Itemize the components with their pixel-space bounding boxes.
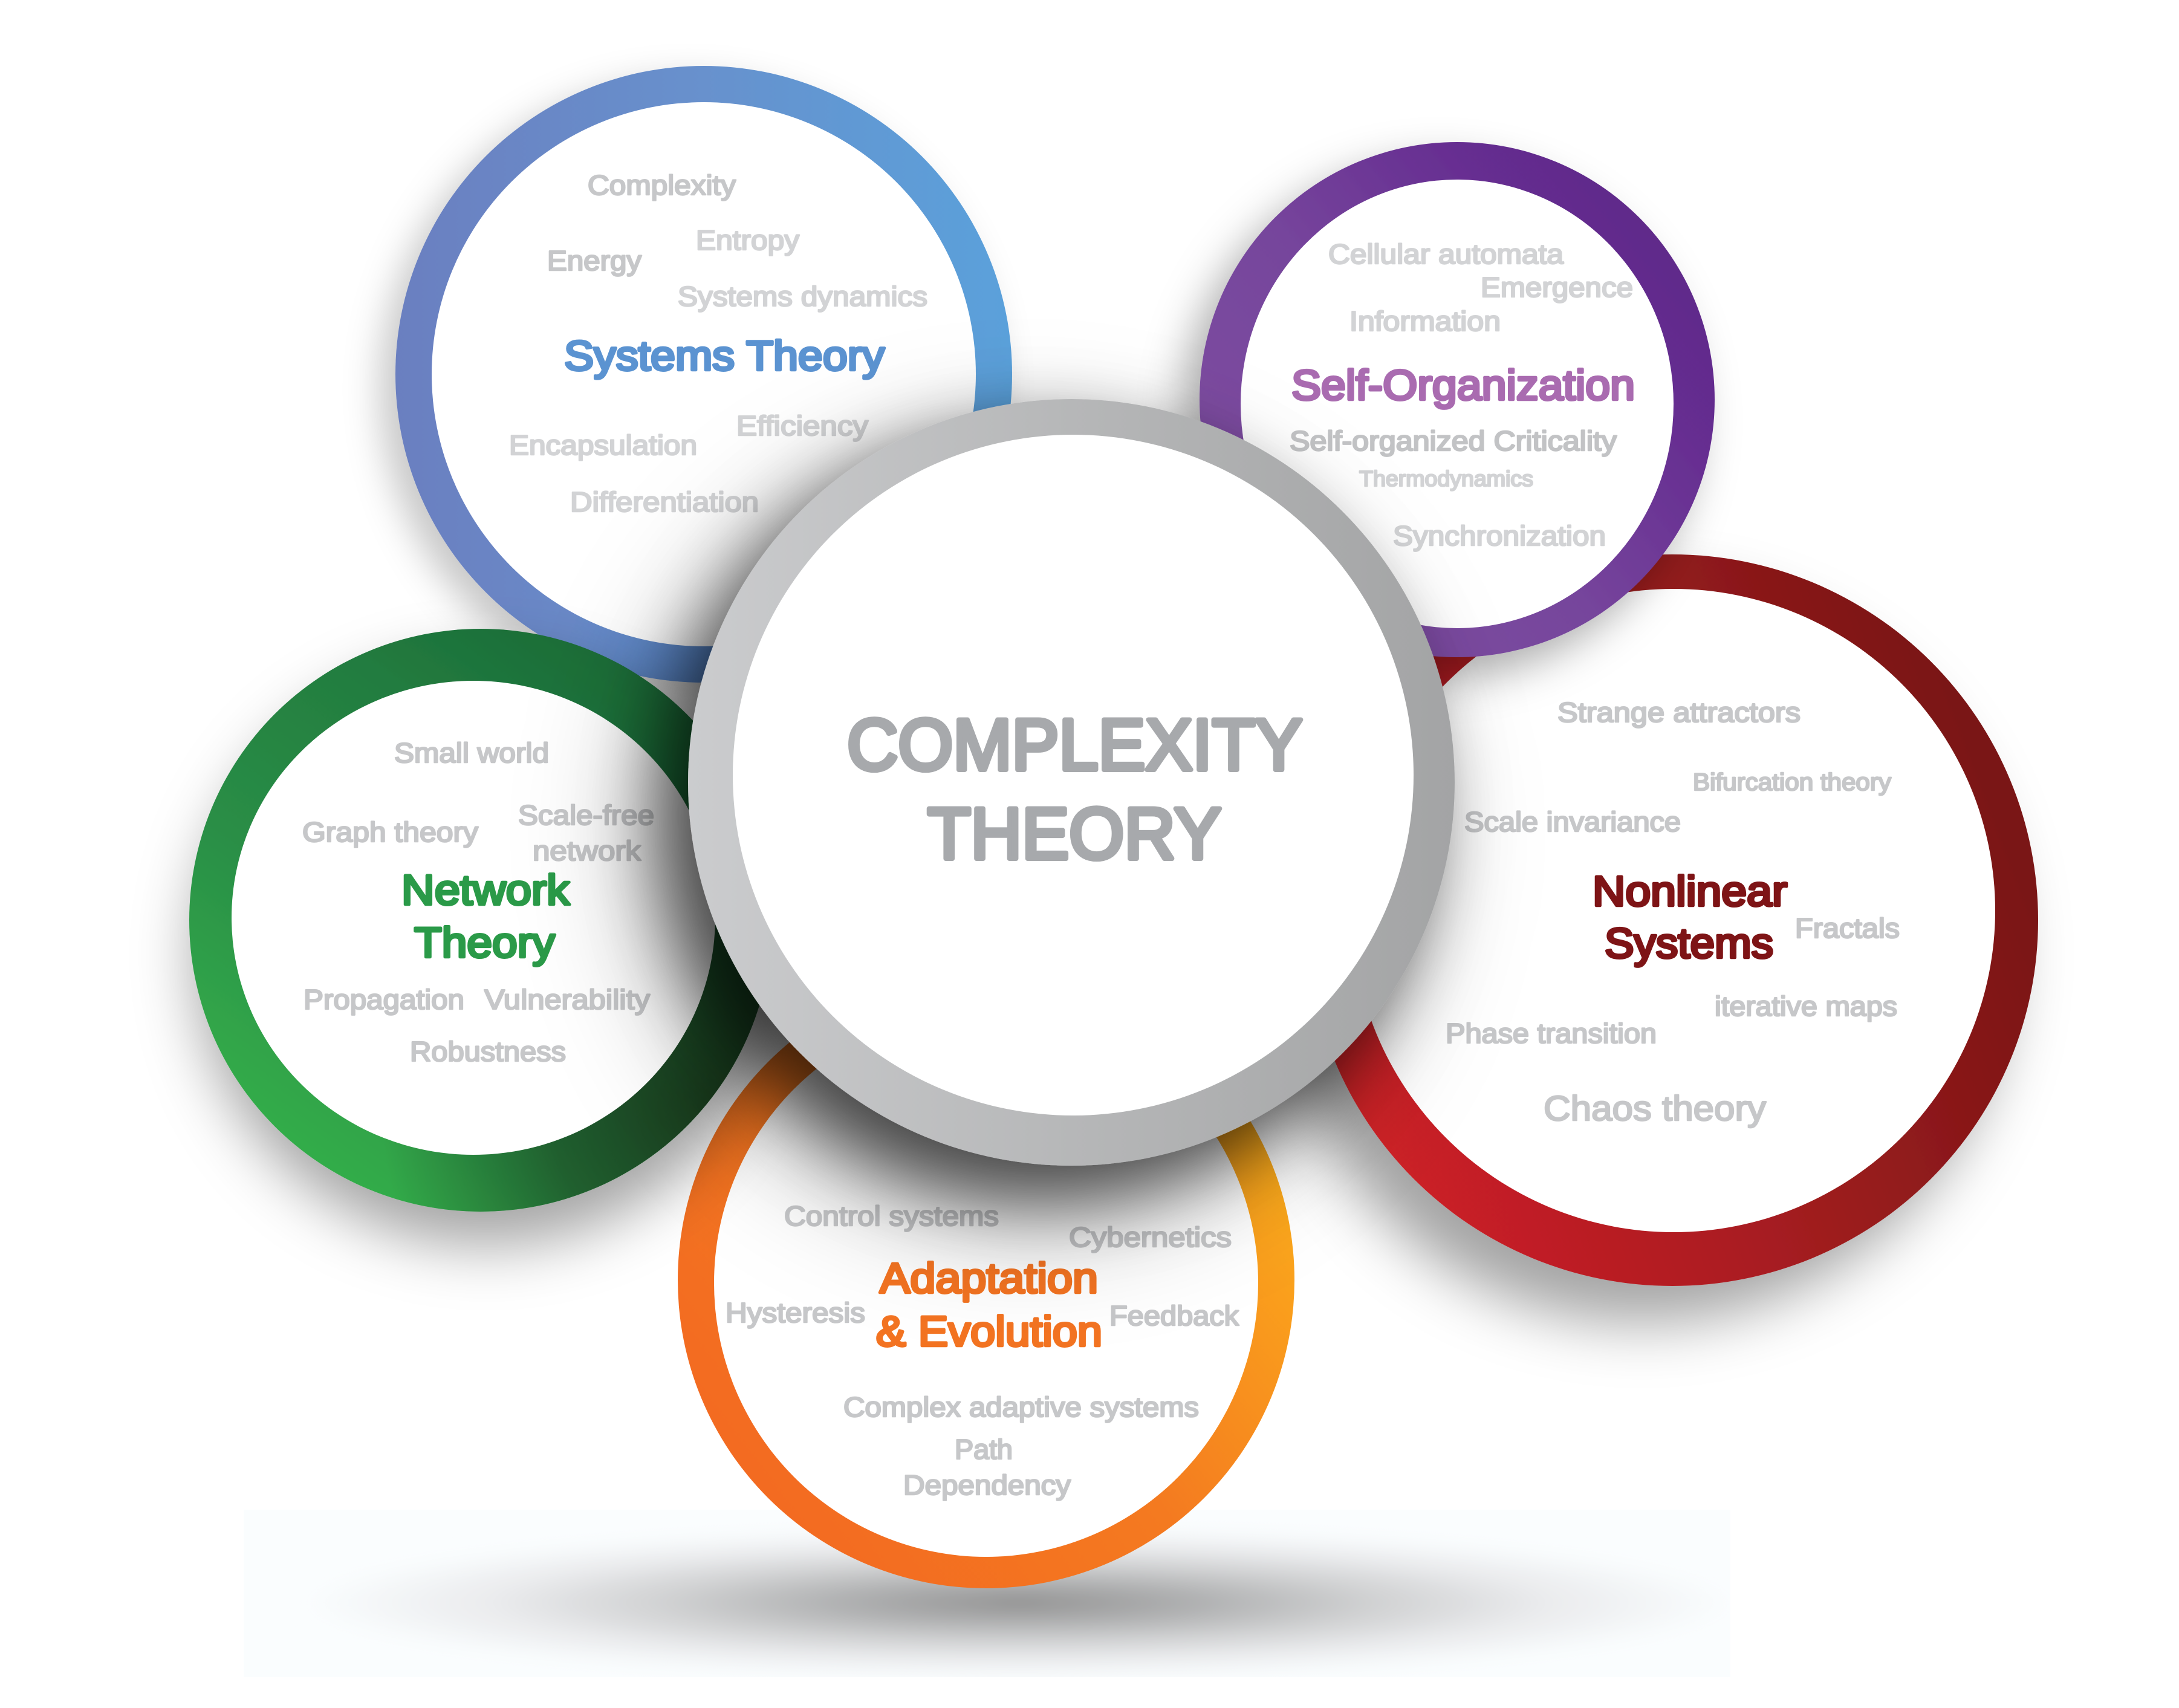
terms: Adaptation & Evolution: Complex adaptive systems <box>843 1391 1199 1423</box>
panel: Nonlinear Systems <box>1307 554 2038 1286</box>
heading: Self-Organization: Self-Organization <box>1291 362 1635 409</box>
terms: Adaptation & Evolution: Control systems <box>784 1200 999 1232</box>
heading: Network Theory <box>401 866 570 966</box>
terms: Systems Theory: Differentiation <box>570 486 759 518</box>
terms: Nonlinear Systems: Phase transition <box>1446 1018 1657 1049</box>
panel: Network Theory <box>189 629 772 1212</box>
panel: Self-Organization <box>1200 142 1715 657</box>
terms: Systems Theory <box>509 169 927 518</box>
heading: Nonlinear Systems: Nonlinear <box>1593 868 1787 915</box>
terms: Adaptation & Evolution: Cybernetics <box>1069 1221 1232 1253</box>
terms: Nonlinear Systems: Chaos theory <box>1544 1089 1766 1128</box>
terms: Nonlinear Systems: Fractals <box>1795 912 1900 944</box>
terms: Self-Organization: Self-organized Criticality <box>1290 425 1617 456</box>
terms: Nonlinear Systems: Strange attractors <box>1557 697 1801 728</box>
terms: Nonlinear Systems <box>1446 697 1900 1128</box>
floor shadow <box>346 1531 1692 1677</box>
terms: Network Theory: Small world <box>394 737 549 768</box>
terms: Nonlinear Systems: iterative maps <box>1715 990 1897 1022</box>
terms: Systems Theory: Entropy <box>696 224 799 256</box>
heading: Network Theory: Theory <box>414 919 555 966</box>
terms: Network Theory: Robustness <box>410 1036 566 1067</box>
panel: Systems Theory <box>395 66 1012 683</box>
terms: Self-Organization: Emergence <box>1481 271 1633 303</box>
heading: Systems Theory: Systems Theory <box>564 333 885 379</box>
terms: Self-Organization: Information <box>1349 305 1501 337</box>
terms: Self-Organization: Thermodynamics <box>1359 466 1533 491</box>
terms: Network Theory: network <box>533 835 641 866</box>
terms: Adaptation & Evolution: Dependency <box>903 1469 1071 1501</box>
terms: Network Theory: Scale-free <box>518 799 654 831</box>
heading: Adaptation & Evolution: & Evolution <box>876 1308 1102 1355</box>
terms: Systems Theory: Complexity <box>588 169 736 201</box>
terms: Adaptation & Evolution: Feedback <box>1109 1300 1239 1331</box>
green ring <box>189 629 772 1212</box>
terms: Adaptation & Evolution: Hysteresis <box>726 1297 865 1328</box>
terms: Self-Organization: Synchronization <box>1393 520 1606 551</box>
heading: Nonlinear Systems: Systems <box>1605 920 1773 967</box>
terms: Self-Organization <box>1290 238 1633 551</box>
terms: Self-Organization: Cellular automata <box>1328 238 1564 270</box>
heading: Nonlinear Systems <box>1593 868 1787 967</box>
center wide shadow <box>641 447 1415 1221</box>
purple ring <box>1200 142 1715 657</box>
terms: Systems Theory: Encapsulation <box>509 429 697 461</box>
terms: Adaptation & Evolution: Path <box>955 1434 1013 1465</box>
grey ring <box>688 399 1455 1166</box>
terms: Nonlinear Systems: Scale invariance <box>1464 806 1681 837</box>
red ring <box>1307 554 2038 1286</box>
heading: Adaptation & Evolution <box>876 1255 1102 1355</box>
heading: Network Theory: Network <box>401 866 570 914</box>
title: Complexity Theory: COMPLEXITY <box>847 704 1302 785</box>
terms: Network Theory: Propagation <box>304 984 464 1015</box>
blue ring <box>395 66 1012 683</box>
terms: Network Theory <box>302 737 654 1067</box>
title: Complexity Theory <box>847 704 1302 874</box>
terms: Systems Theory: Efficiency <box>736 410 868 441</box>
terms: Network Theory: Graph theory <box>302 816 478 848</box>
panel: Complexity Theory center <box>641 399 1455 1221</box>
terms: Adaptation & Evolution <box>726 1200 1239 1501</box>
terms: Systems Theory: Energy <box>547 245 641 276</box>
terms: Systems Theory: Systems dynamics <box>678 281 927 312</box>
title: Complexity Theory: THEORY <box>927 793 1221 874</box>
terms: Network Theory: Vulnerability <box>484 984 650 1015</box>
panel: Adaptation & Evolution <box>678 972 1294 1588</box>
terms: Nonlinear Systems: Bifurcation theory <box>1693 769 1891 796</box>
heading: Adaptation & Evolution: Adaptation <box>880 1255 1098 1302</box>
orange ring <box>678 972 1294 1588</box>
